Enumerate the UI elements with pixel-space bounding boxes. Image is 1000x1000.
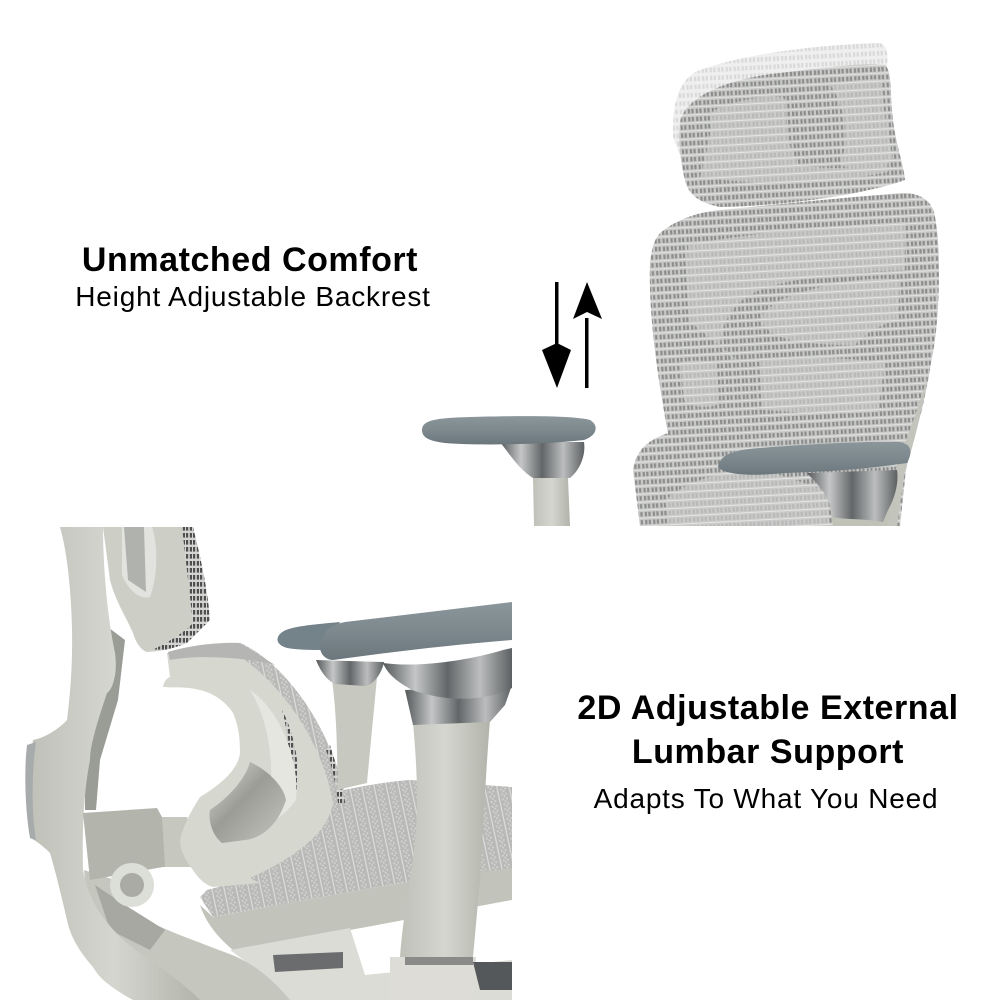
icon: up arrow xyxy=(573,282,602,388)
heading: 2D Adjustable External Lumbar Support xyxy=(577,689,959,771)
photo: chair backrest and headrest xyxy=(422,43,939,526)
photo: lumbar support close-up xyxy=(25,527,512,1000)
heading: 2D Adjustable External Lumbar Support: 2D Adjustable External xyxy=(577,689,959,727)
subheading: Adapts To What You Need: Adapts To What You Need xyxy=(594,783,938,814)
icon: down arrow xyxy=(542,282,571,388)
heading: Unmatched Comfort: Unmatched Comfort xyxy=(82,241,418,279)
heading: 2D Adjustable External Lumbar Support: Lumbar Support xyxy=(632,733,904,771)
subheading: Height Adjustable Backrest: Height Adjustable Backrest xyxy=(75,281,431,312)
